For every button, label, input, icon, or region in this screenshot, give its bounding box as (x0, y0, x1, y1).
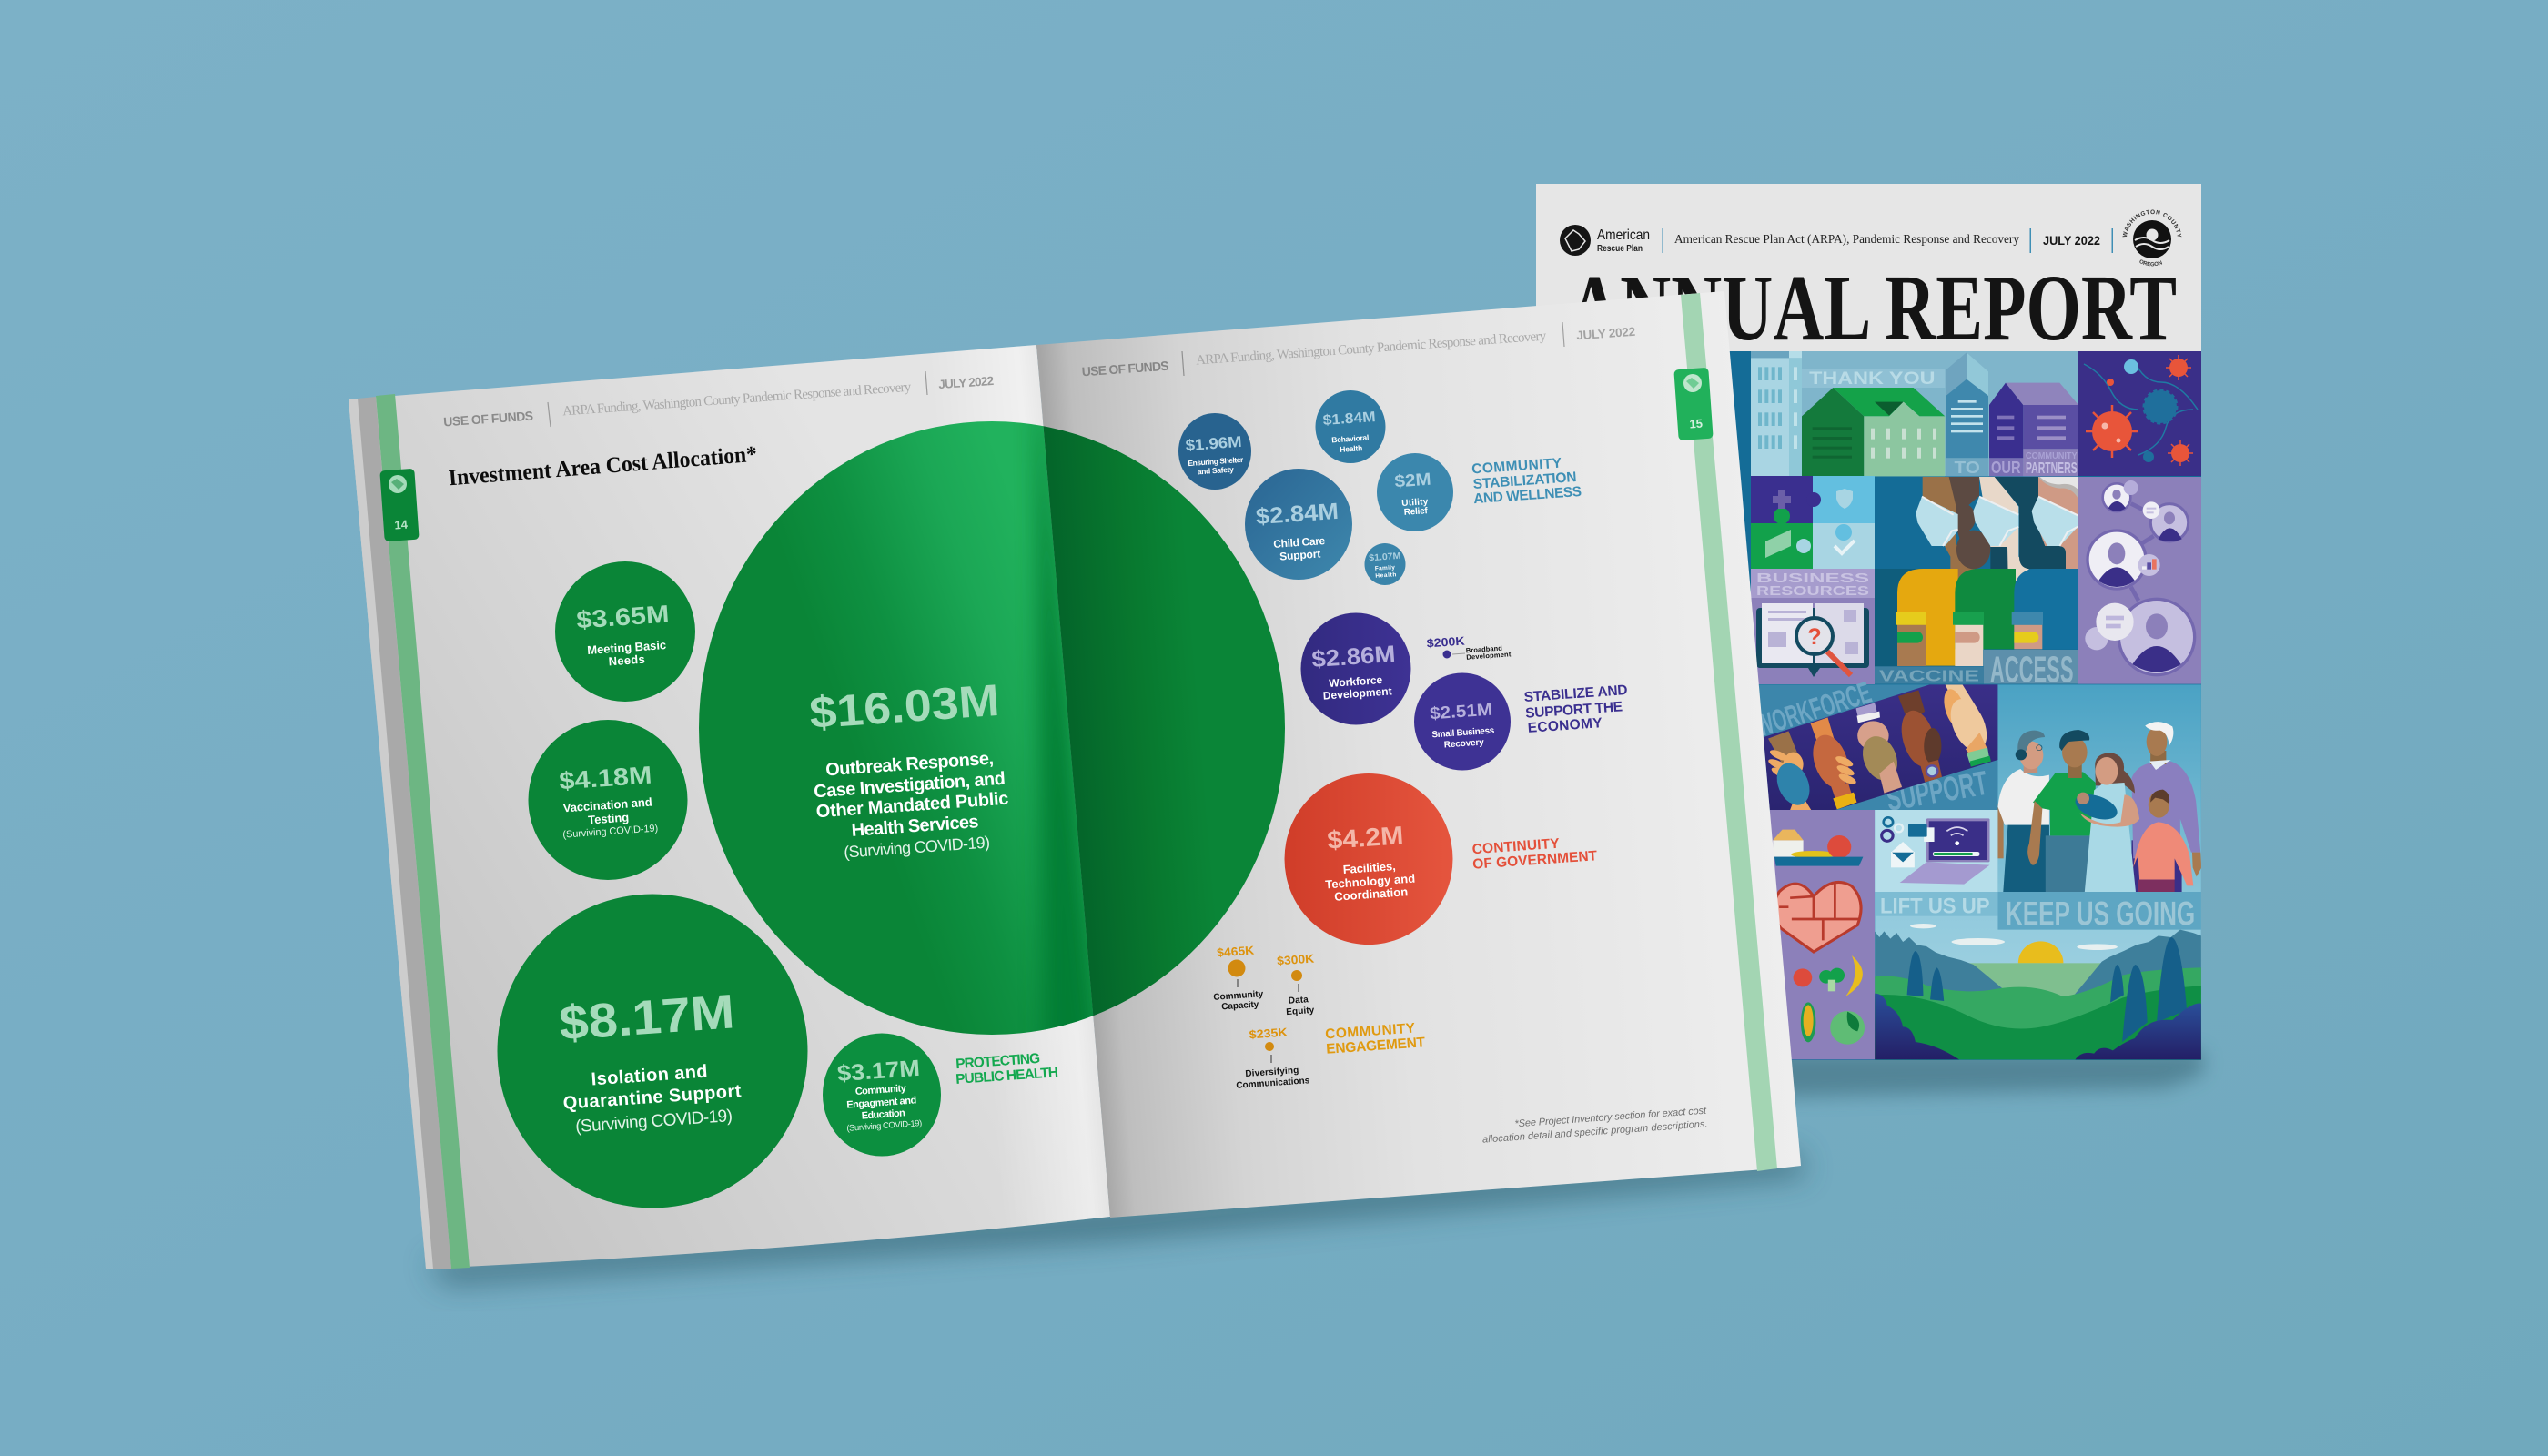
hand pair 1 (1768, 731, 1811, 810)
report cover (1536, 184, 2201, 360)
tile: networked people avatars (2078, 477, 2201, 684)
category label: community stabilization and wellness: STABILIZATION (1472, 470, 1577, 492)
cover header band (1536, 184, 2201, 351)
category label: continuity of government (1471, 836, 1598, 873)
left page: protecting public health (349, 345, 1110, 1269)
county seal: WASHINGTON COUNTY (2122, 209, 2182, 237)
bubble: $3.17M community engagement: Engagment and (846, 1095, 917, 1111)
bubble: $2.86M workforce development: $2.86M (1311, 642, 1396, 672)
bubble: $1.84M behavioral health: Behavioral (1331, 433, 1370, 444)
bubble: $2M utility relief: Relief (1403, 506, 1429, 518)
bubble: $16.03M outbreak response: Other Mandated Public (815, 789, 1009, 822)
mother and baby (2072, 753, 2139, 892)
cover illustration collage (1729, 351, 2201, 1060)
bubble: $8.17M isolation and quarantine: (Surviving COVID-19) (575, 1107, 733, 1137)
page tab 14: 14 (394, 517, 409, 531)
small item: $300K data equity: Data (1288, 995, 1309, 1006)
open report spread (349, 291, 1801, 1269)
tile: masked faces and vaccine access (1875, 477, 2078, 691)
small item: $235K diversifying communications: Communications (1236, 1076, 1310, 1091)
category label: protecting public health (956, 1051, 1059, 1087)
bubble: $3.65M meeting basic needs (555, 561, 695, 702)
category label: protecting public health: PROTECTING (956, 1051, 1041, 1072)
bubble: $4.2M facilities technology coordination: Coordination (1334, 885, 1409, 904)
county seal: OREGON (2139, 260, 2162, 266)
small item: $465K community capacity: Community (1213, 989, 1264, 1003)
category label: stabilize and support the economy: ECONOMY (1527, 715, 1603, 736)
hand pair 3 (1855, 703, 1904, 794)
small item: $200K broadband development: Broadband (1466, 644, 1502, 654)
tile: landscape, keep us going (1875, 892, 2201, 1059)
bubble: $2.51M small business recovery: $2.51M (1429, 701, 1493, 723)
bubble: $2.84M child care: Support (1279, 547, 1321, 563)
running head: USE OF FUNDS (443, 409, 534, 429)
category label: community stabilization and wellness: COMMUNITY (1471, 456, 1562, 477)
bubble: $1.96M ensuring shelter (1178, 413, 1251, 490)
bubble: $16.03M outbreak response: (Surviving COVID-19) (844, 833, 991, 862)
bubble: $4.2M facilities technology coordination (1285, 774, 1452, 945)
bubble: $1.07M family health: Family (1375, 564, 1395, 572)
category label: community stabilization and wellness: AND WELLNESS (1473, 484, 1582, 507)
category label: community stabilization and wellness (1471, 456, 1582, 507)
bubble: $3.17M community engagement: (Surviving COVID-19) (846, 1118, 923, 1134)
cover title: Annual Report: ANNUAL REPORT (1569, 256, 2177, 360)
category label: stabilize and support the economy: SUPPORT THE (1525, 699, 1623, 722)
tile: buildings and thank you: THANK YOU (1809, 369, 1935, 389)
bubble: $4.18M vaccination and testing: Vaccination and (562, 795, 652, 814)
bubble: $2.86M workforce development (1301, 613, 1410, 724)
cover header text: American Rescue Plan Act (ARPA), Pandemic Response and Recovery (1674, 232, 2019, 246)
bubble: $2.84M child care: $2.84M (1255, 499, 1340, 530)
small item: $300K data equity (1277, 952, 1315, 1017)
tile: buildings and thank you: COMMUNITY (2026, 451, 2078, 461)
page tab 15 (1673, 368, 1714, 440)
bubble: $1.96M ensuring shelter: Ensuring Shelter (1188, 455, 1244, 468)
cover header text: JULY 2022 (2043, 234, 2100, 248)
category label: continuity of government: CONTINUITY (1471, 836, 1561, 857)
bubble: $4.2M facilities technology coordination: Technology and (1325, 872, 1416, 891)
tile: virus particles (2078, 351, 2201, 476)
small item: $200K broadband development: Development (1466, 650, 1512, 662)
hand pair 5 (1944, 684, 1991, 767)
tile: business resources: RESOURCES (1756, 583, 1869, 599)
bubble: $3.17M community engagement (823, 1034, 941, 1156)
tile: food and heart (1770, 810, 1875, 1059)
tile: workforce support hands: SUPPORT (1884, 764, 1990, 819)
page tab 14 (379, 469, 420, 541)
bubble: $1.96M ensuring shelter: $1.96M (1185, 433, 1242, 454)
footnote: allocation detail and specific program descriptions. (1482, 1118, 1708, 1146)
bubble: $1.07M family health: $1.07M (1369, 551, 1401, 563)
bubble: $2M utility relief: $2M (1394, 470, 1431, 491)
boy (2133, 790, 2193, 893)
bubble: $8.17M isolation and quarantine: $8.17M (557, 985, 736, 1051)
running head: JULY 2022 (938, 374, 995, 391)
tile: family (1997, 684, 2201, 894)
bubble: $4.18M vaccination and testing (528, 720, 688, 880)
small item: $235K diversifying communications (1236, 1026, 1310, 1091)
small item: $465K community capacity: $465K (1217, 944, 1255, 959)
bubble: $2.51M small business recovery: Small Business (1431, 726, 1495, 740)
tile: buildings and thank you: OUR (1991, 458, 2021, 477)
bubble: $16.03M outbreak response: Outbreak Response, (825, 749, 995, 780)
bubble: $16.03M outbreak response: Health Services (851, 812, 979, 841)
bubble: $8.17M isolation and quarantine (497, 894, 808, 1208)
footnote (1482, 1106, 1708, 1146)
bubble: $1.07M family health: Health (1375, 571, 1397, 580)
tile: landscape, keep us going: LIFT US UP (1880, 895, 1989, 918)
tile: business resources (1751, 569, 1875, 684)
tile: buildings and thank you (1751, 351, 2078, 477)
small item: $235K diversifying communications: $235K (1249, 1026, 1289, 1041)
woman with glasses (1997, 731, 2049, 892)
category label: stabilize and support the economy (1523, 682, 1628, 736)
bubble: $2.86M workforce development: Development (1322, 684, 1392, 703)
bubble: $2.51M small business recovery: Recovery (1443, 737, 1485, 751)
bubble: $1.84M behavioral health: Health (1340, 443, 1363, 454)
small item: $235K diversifying communications: Diversifying (1245, 1066, 1299, 1079)
small item: $300K data equity: Equity (1286, 1006, 1315, 1017)
hand pair 2 (1806, 717, 1857, 809)
hand pair 4 (1896, 690, 1942, 782)
running head: USE OF FUNDS (1081, 359, 1169, 379)
running head (1081, 322, 1636, 379)
footnote: *See Project Inventory section for exact cost (1514, 1106, 1707, 1129)
tile: business resources: BUSINESS (1756, 571, 1869, 586)
bubble: $3.65M meeting basic needs: Meeting Basic (587, 638, 667, 657)
small item: $465K community capacity: Capacity (1221, 1000, 1259, 1012)
bubble: $8.17M isolation and quarantine: Isolation and (591, 1062, 708, 1089)
bubble: $1.96M ensuring shelter: and Safety (1197, 465, 1234, 476)
bubble: $1.07M family health (1365, 543, 1405, 585)
small item: $300K data equity: $300K (1277, 952, 1315, 967)
tile: masked faces and vaccine access: ACCESS (1990, 649, 2073, 691)
right page (1036, 291, 1801, 1218)
category label: continuity of government: OF GOVERNMENT (1472, 848, 1598, 873)
father in green shirt (2027, 730, 2096, 894)
tile: puzzle pieces (1751, 476, 1875, 569)
bubble: $2M utility relief (1377, 453, 1453, 531)
category label: protecting public health: PUBLIC HEALTH (956, 1065, 1059, 1087)
bubble: $16.03M outbreak response: $16.03M (808, 676, 1001, 738)
county seal (2122, 209, 2182, 266)
grandfather (2131, 722, 2201, 894)
bubble: $3.17M community engagement: Community (854, 1083, 907, 1097)
bubble: $2.86M workforce development: Workforce (1329, 673, 1383, 690)
category label: community engagement: ENGAGEMENT (1326, 1035, 1426, 1057)
bubble: $4.18M vaccination and testing: $4.18M (558, 762, 652, 795)
running head: ARPA Funding, Washington County Pandemic Response and Recovery (562, 380, 912, 419)
bubble: $16.03M outbreak response (699, 421, 1285, 1035)
running head: JULY 2022 (1576, 325, 1636, 342)
category label: community engagement: COMMUNITY (1325, 1021, 1416, 1042)
bubble: $4.2M facilities technology coordination: Facilities, (1342, 859, 1396, 876)
logo: American Rescue Plan: Rescue Plan (1597, 243, 1643, 254)
bubble: $8.17M isolation and quarantine: Quarantine Support (562, 1081, 742, 1114)
bubble: $3.17M community engagement: $3.17M (836, 1056, 921, 1087)
bubble: $16.03M outbreak response: Case Investigation, and (814, 769, 1006, 802)
cover drop shadow (1729, 1051, 2203, 1097)
tile: buildings and thank you: PARTNERS (2026, 459, 2078, 477)
category label: community engagement (1325, 1021, 1426, 1057)
tile: business resources: ? (1807, 624, 1822, 650)
tile: laptop and connectivity (1875, 810, 1997, 892)
tile: buildings and thank you: TO (1954, 458, 1980, 477)
bubble: $1.84M behavioral health: $1.84M (1322, 410, 1376, 429)
tile: workforce support hands: WORKFORCE (1752, 675, 1876, 743)
bubble: $4.18M vaccination and testing: (Surviving COVID-19) (562, 823, 659, 841)
running head (443, 371, 995, 429)
bubble: $3.65M meeting basic needs: Needs (608, 652, 645, 668)
running head: ARPA Funding, Washington County Pandemic Response and Recovery (1196, 329, 1547, 368)
tile: masked faces and vaccine access: VACCINE (1879, 666, 1979, 684)
bubble: $4.18M vaccination and testing: Testing (588, 810, 630, 827)
bubble: $1.84M behavioral health (1316, 390, 1385, 463)
small item: $200K broadband development: $200K (1426, 634, 1466, 650)
page tab 15: 15 (1689, 417, 1703, 430)
logo: American Rescue Plan (1560, 225, 1650, 256)
small item: $465K community capacity (1213, 944, 1264, 1012)
bubble: $4.2M facilities technology coordination: $4.2M (1326, 821, 1404, 854)
bubble: $2.84M child care (1245, 469, 1352, 580)
bubble: $3.17M community engagement: Education (861, 1107, 905, 1122)
tile: workforce support hands (1759, 682, 1998, 810)
logo: American Rescue Plan: American (1597, 228, 1650, 243)
book shadow (428, 1151, 1806, 1285)
heading: investment area cost allocation: Investment Area Cost Allocation* (448, 442, 758, 490)
bubble: $2.51M small business recovery (1414, 673, 1511, 770)
bubble: $3.65M meeting basic needs: $3.65M (575, 601, 670, 634)
bubble: $2.84M child care: Child Care (1273, 534, 1326, 551)
tile: landscape, keep us going: KEEP US GOING (2006, 895, 2195, 934)
cover header text (1662, 228, 2113, 253)
bubble: $2M utility relief: Utility (1401, 497, 1429, 509)
category label: stabilize and support the economy: STABILIZE AND (1523, 682, 1628, 705)
small item: $200K broadband development (1426, 634, 1512, 662)
